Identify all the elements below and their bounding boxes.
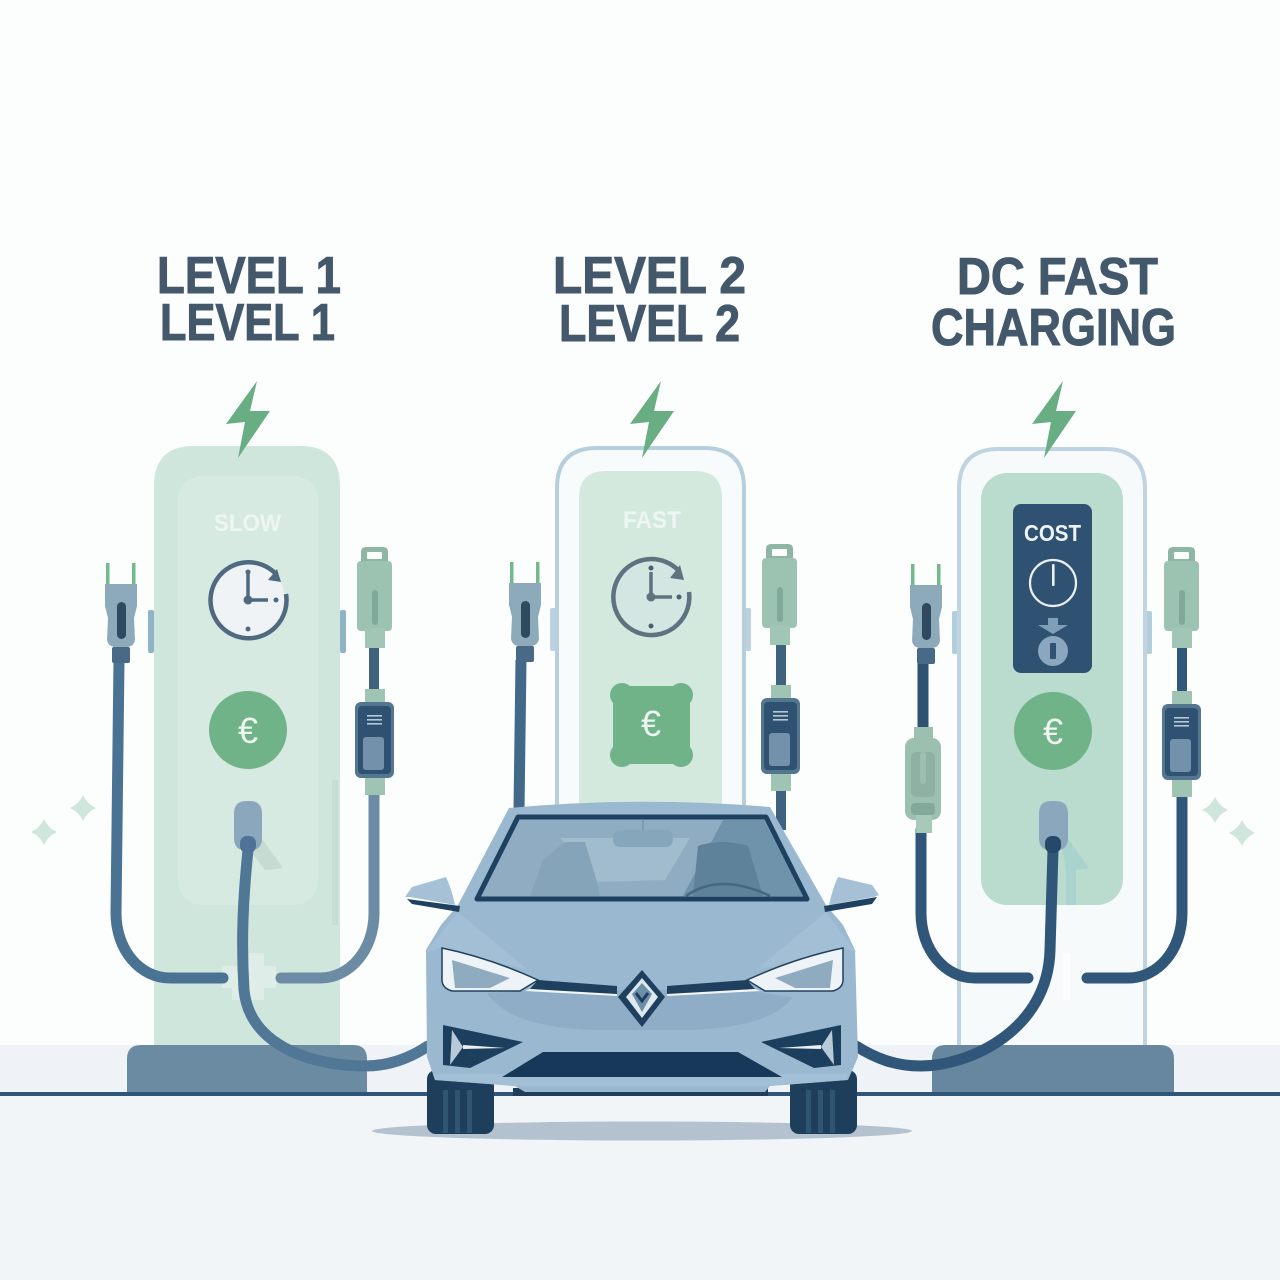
connector dc center bbox=[1039, 801, 1068, 853]
ground bbox=[0, 1095, 1280, 1280]
bumper shading bbox=[487, 990, 793, 1030]
emblem bbox=[618, 970, 665, 1027]
heading: level 1: LEVEL 1 bbox=[160, 294, 335, 352]
heading: dc fast charging bbox=[931, 248, 1176, 357]
car shadow bbox=[372, 1122, 912, 1140]
icon: clock bbox=[211, 562, 287, 638]
connector level 1 center bbox=[234, 801, 262, 853]
icon: euro: € bbox=[1043, 711, 1063, 752]
charger base dc bbox=[932, 1045, 1174, 1093]
icon: bolt level 1 bbox=[226, 381, 270, 458]
cables dc bbox=[856, 648, 1182, 1066]
icon: bolt dc bbox=[1032, 381, 1076, 458]
icon: coin bbox=[1038, 636, 1068, 666]
underbody bbox=[513, 1088, 768, 1096]
tyres bbox=[427, 1070, 857, 1134]
plug level 1 right bbox=[357, 547, 392, 648]
heading: dc fast charging: CHARGING bbox=[931, 299, 1176, 357]
panel: dc fast charger bbox=[952, 449, 1152, 1046]
controller level 1 bbox=[355, 689, 394, 795]
sparkles right bbox=[1202, 797, 1255, 846]
icon: euro bbox=[209, 691, 287, 769]
plug level 2 right bbox=[762, 544, 797, 645]
charger base level 1 bbox=[127, 1045, 367, 1093]
heading: level 1: LEVEL 1 bbox=[157, 247, 341, 305]
heading: level 2: LEVEL 2 bbox=[553, 247, 746, 305]
windshield bbox=[477, 817, 807, 899]
fog lights bbox=[443, 1025, 841, 1068]
controller level 2 bbox=[761, 685, 800, 791]
icon: gauge bbox=[1030, 560, 1076, 606]
plug dc right bbox=[1164, 547, 1199, 648]
ground line bbox=[0, 1092, 1280, 1096]
heading: level 2 bbox=[553, 247, 746, 353]
cables level 1 bbox=[116, 648, 428, 1066]
heading: level 1 bbox=[157, 247, 341, 352]
plug dc left bbox=[910, 564, 942, 664]
icon: euro tag bbox=[610, 683, 693, 767]
icon: euro bbox=[1014, 692, 1092, 770]
icon: euro: € bbox=[238, 710, 258, 751]
headlights bbox=[442, 948, 843, 991]
lower grille bbox=[502, 1052, 782, 1077]
heading: dc fast charging: DC FAST bbox=[957, 248, 1158, 306]
icon: bolt level 2 bbox=[630, 381, 674, 458]
icon: euro tag: € bbox=[641, 703, 661, 744]
mirrors bbox=[405, 877, 879, 912]
panel: level 2 charger bbox=[550, 448, 751, 810]
label: fast: FAST bbox=[623, 507, 681, 534]
controller dc bbox=[1162, 691, 1201, 797]
floor band bbox=[0, 1045, 1280, 1093]
plug level 2 left bbox=[509, 562, 541, 662]
body bbox=[426, 802, 858, 1092]
plug level 1 left bbox=[105, 563, 137, 663]
connector dc left green bbox=[905, 727, 941, 833]
label: slow: SLOW bbox=[214, 510, 281, 537]
sparkles left bbox=[31, 795, 96, 845]
panel: level 1 charger bbox=[148, 446, 346, 1046]
cables level 2 bbox=[519, 645, 781, 830]
car bbox=[405, 802, 879, 1134]
icon: clock bbox=[613, 559, 689, 635]
label: cost: COST bbox=[1024, 520, 1081, 546]
dark cost panel bbox=[1013, 504, 1092, 673]
fender highlights bbox=[426, 912, 856, 1086]
grille bar bbox=[525, 980, 760, 996]
heading: level 2: LEVEL 2 bbox=[559, 295, 740, 353]
icon: arrow bbox=[1038, 618, 1068, 634]
